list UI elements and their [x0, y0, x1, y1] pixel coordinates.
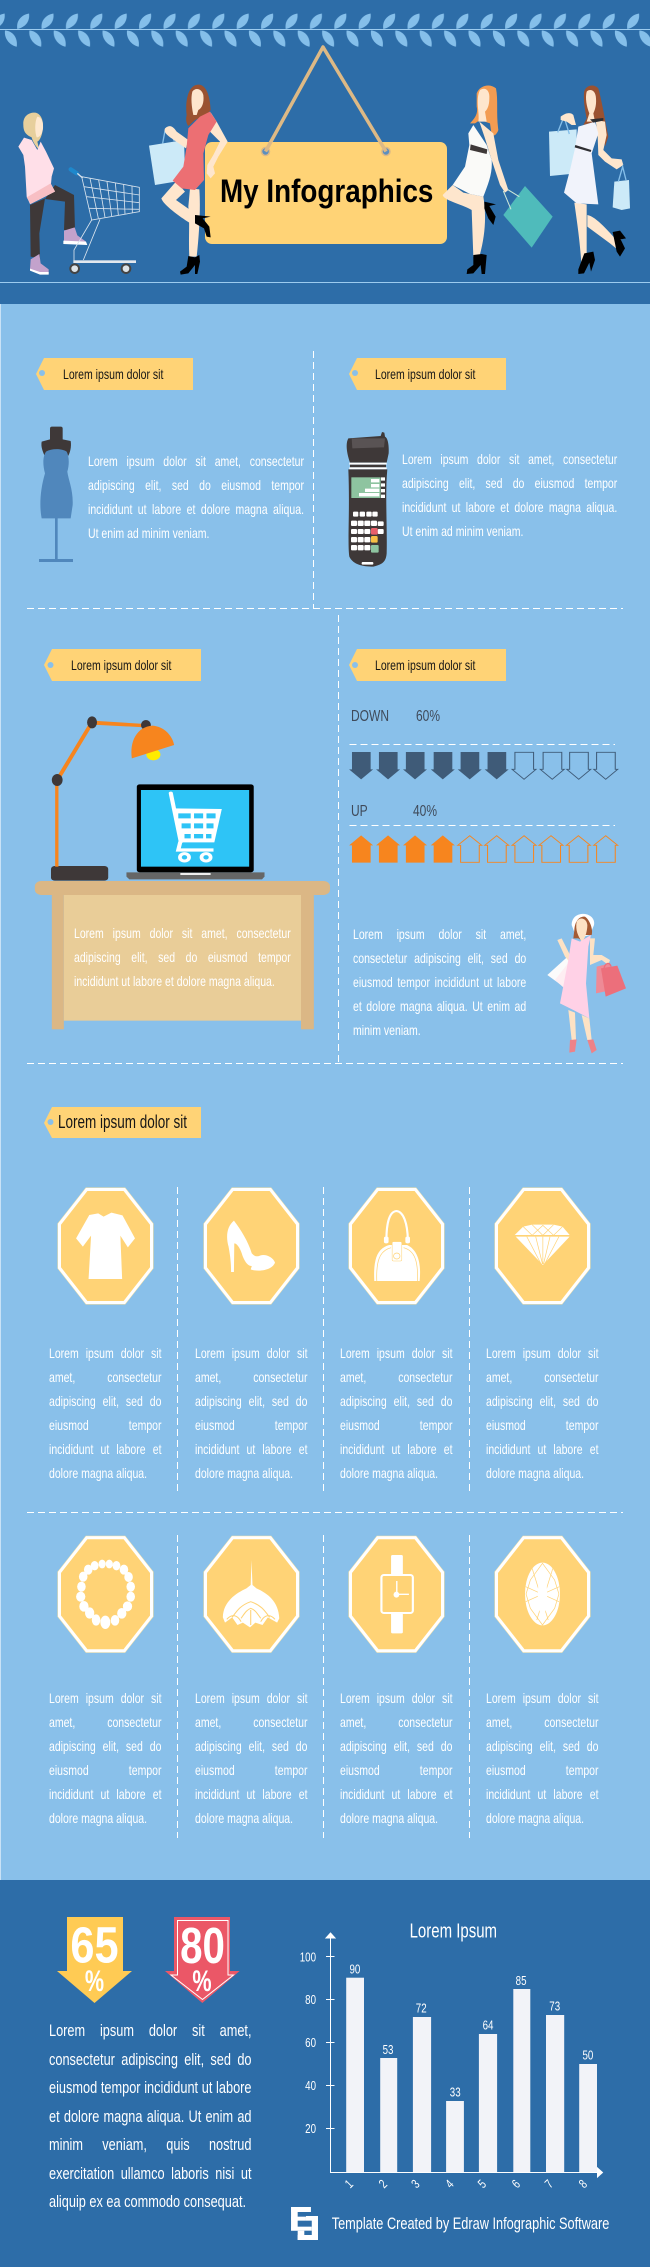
text block: beside woman: consectetur adipiscing elit, sed do [353, 950, 526, 966]
text: diamond column: eiusmod tempor [486, 1417, 599, 1433]
text: handbag column: eiusmod tempor [340, 1417, 453, 1433]
text: diamond column: incididunt ut labore et [486, 1441, 599, 1457]
text block: beside woman: Lorem ipsum dolor sit amet, [353, 926, 526, 942]
icon: card payment terminal [347, 432, 389, 567]
tag: products heading [44, 1107, 201, 1138]
text: pendant column: eiusmod tempor [195, 1762, 308, 1778]
text: heel column: adipiscing elit, sed do [195, 1393, 308, 1409]
chart y axis labels: 20 [305, 2123, 316, 2137]
callout: 65 percent arrow [57, 1917, 132, 2003]
tag: arrows heading [349, 649, 506, 681]
text block: beside woman: eiusmod tempor incididunt ut labore [353, 974, 526, 990]
chart value labels: 85 [516, 1975, 527, 1988]
text: shirt column: incididunt ut labore et [49, 1441, 162, 1457]
label: up percent: 40% [413, 803, 437, 820]
text: gem column: dolore magna aliqua. [486, 1810, 584, 1826]
icon: oval gem [494, 1536, 590, 1653]
text block: mannequin description: Lorem ipsum dolor sit amet, consectetur [88, 453, 304, 469]
icon: high heel [204, 1188, 300, 1304]
chart title: Lorem Ipsum [410, 1919, 497, 1942]
text: pendant column [195, 1690, 308, 1826]
text: watch column: dolore magna aliqua. [340, 1810, 438, 1826]
callout: 80 percent arrow: 80 [180, 1916, 225, 1974]
text: watch column: amet, consectetur [340, 1714, 453, 1730]
chart x axis labels [343, 2178, 590, 2191]
text: handbag column: Lorem ipsum dolor sit [340, 1345, 453, 1361]
heading: desk tag label: Lorem ipsum dolor sit [71, 657, 171, 673]
text: bracelet column: incididunt ut labore et [49, 1786, 162, 1802]
text block: terminal description: Lorem ipsum dolor sit amet, consectetur [402, 451, 617, 467]
text: bracelet column: adipiscing elit, sed do [49, 1738, 162, 1754]
chart x axis labels: 1 [343, 2178, 356, 2191]
chart value labels [349, 1964, 593, 2100]
label: down percent: 60% [416, 708, 440, 725]
text block: mannequin description: Ut enim ad minim veniam. [88, 525, 209, 541]
text: pendant column: adipiscing elit, sed do [195, 1738, 308, 1754]
text block: footer paragraph: et dolore magna aliqua. Ut enim ad [49, 2106, 252, 2126]
chart bars [346, 1978, 597, 2172]
text: gem column: incididunt ut labore et [486, 1786, 599, 1802]
text block: beside woman [353, 926, 526, 1038]
text: watch column: adipiscing elit, sed do [340, 1738, 453, 1754]
chart y axis labels: 100 [300, 1951, 316, 1965]
text block: footer paragraph: consectetur adipiscing elit, sed do [49, 2050, 252, 2068]
text: shirt column: Lorem ipsum dolor sit [49, 1345, 162, 1361]
text: shirt column: adipiscing elit, sed do [49, 1393, 162, 1409]
sign title: My Infographics [220, 174, 433, 209]
chart y axis labels: 40 [305, 2080, 316, 2094]
text: gem column: adipiscing elit, sed do [486, 1738, 599, 1754]
chart y axis labels: 80 [305, 1994, 316, 2008]
text: heel column [195, 1345, 308, 1481]
chart x axis labels: 7 [543, 2178, 556, 2191]
chart x axis labels: 5 [476, 2178, 489, 2191]
figure: woman in pink dress [547, 914, 626, 1053]
text: handbag column: incididunt ut labore et [340, 1441, 453, 1457]
tag: desk heading [44, 649, 201, 681]
figure: woman in white dress with teal bag [443, 86, 553, 274]
heading: products tag label: Lorem ipsum dolor sit [58, 1112, 187, 1132]
text: shirt column: eiusmod tempor [49, 1417, 162, 1433]
illustration: desk [35, 881, 330, 1029]
text: bracelet column: Lorem ipsum dolor sit [49, 1690, 162, 1706]
text: diamond column: Lorem ipsum dolor sit [486, 1345, 599, 1361]
text: handbag column: amet, consectetur [340, 1369, 453, 1385]
chart value labels: 33 [450, 2087, 461, 2100]
text block: mannequin description [88, 453, 304, 541]
text: gem column: amet, consectetur [486, 1714, 599, 1730]
text: watch column: Lorem ipsum dolor sit [340, 1690, 453, 1706]
chart: up arrows 40% [349, 835, 618, 863]
text: bracelet column: eiusmod tempor [49, 1762, 162, 1778]
text: gem column [486, 1690, 599, 1826]
text: gem column: eiusmod tempor [486, 1762, 599, 1778]
icon: pendant necklace [204, 1536, 300, 1653]
text block: terminal description: adipiscing elit, sed do eiusmod tempor [402, 475, 617, 491]
text: watch column: incididunt ut labore et [340, 1786, 453, 1802]
chart x axis labels: 6 [510, 2178, 523, 2191]
panel: top info section [0, 304, 623, 609]
text block: terminal description: Ut enim ad minim veniam. [402, 523, 523, 539]
text block: on desk [74, 925, 291, 989]
chart value labels: 72 [416, 2003, 427, 2016]
text: gem column: Lorem ipsum dolor sit [486, 1690, 599, 1706]
figure: woman with blue bags [549, 85, 630, 274]
text: shirt column [49, 1345, 162, 1481]
icon: diamond [494, 1188, 590, 1304]
text: diamond column: adipiscing elit, sed do [486, 1393, 599, 1409]
icon: handbag [348, 1188, 444, 1304]
callout: 65 percent arrow: 65 [70, 1917, 119, 1975]
text block: terminal description [402, 451, 618, 539]
panel: product icons section [0, 1064, 623, 1880]
chart axes [326, 1933, 602, 2177]
callout: 80 percent arrow [165, 1916, 240, 2003]
text: pendant column: Lorem ipsum dolor sit [195, 1690, 308, 1706]
heading: left tag label: Lorem ipsum dolor sit [63, 366, 163, 382]
text block: on desk: Lorem ipsum dolor sit amet, consectetur [74, 925, 291, 941]
text block: terminal description: incididunt ut labore et dolore magna aliqua. [402, 499, 617, 515]
text block: on desk: adipiscing elit, sed do eiusmod tempor [74, 949, 291, 965]
heading: arrows tag label: Lorem ipsum dolor sit [375, 657, 475, 673]
text block: footer paragraph: exercitation ullamco laboris nisi ut [49, 2164, 252, 2182]
heading: right tag label: Lorem ipsum dolor sit [375, 366, 475, 382]
panel: footer statistics and chart [0, 1880, 650, 2267]
chart: bar chart [300, 1919, 602, 2191]
text: heel column: amet, consectetur [195, 1369, 308, 1385]
label: down: DOWN [351, 708, 389, 725]
text: heel column: Lorem ipsum dolor sit [195, 1345, 308, 1361]
chart value labels: 50 [582, 2050, 593, 2063]
chart: down arrows 60% [349, 752, 618, 779]
text block: footer paragraph [49, 2021, 252, 2211]
text: bracelet column: amet, consectetur [49, 1714, 162, 1730]
text: bracelet column [49, 1690, 162, 1826]
callout: 80 percent arrow: % [192, 1963, 212, 1998]
chart value labels: 53 [383, 2044, 393, 2057]
chart x axis labels: 8 [577, 2178, 590, 2191]
illustration: desk lamp [51, 716, 174, 881]
icon: Edraw logo [291, 2207, 318, 2240]
text: heel column: dolore magna aliqua. [195, 1465, 293, 1481]
label: up: UP [351, 803, 368, 820]
text: diamond column [486, 1345, 599, 1481]
text: bracelet column: dolore magna aliqua. [49, 1810, 147, 1826]
panel: header banner [0, 0, 650, 304]
text block: footer paragraph: Lorem ipsum dolor sit amet, [49, 2021, 252, 2040]
text: handbag column: dolore magna aliqua. [340, 1465, 438, 1481]
callout: 65 percent arrow: % [85, 1963, 104, 1998]
tag: left heading [36, 358, 193, 390]
panel: desk and arrows section [0, 609, 626, 1064]
text: heel column: eiusmod tempor [195, 1417, 308, 1433]
text block: footer paragraph: eiusmod tempor incididunt ut labore [49, 2078, 252, 2097]
icon: pearl bracelet [58, 1536, 154, 1653]
chart x axis labels: 4 [443, 2178, 457, 2191]
text: shirt column: amet, consectetur [49, 1369, 162, 1385]
text: pendant column: dolore magna aliqua. [195, 1810, 293, 1826]
text: watch column [340, 1690, 453, 1826]
chart y axis labels: 60 [305, 2037, 316, 2051]
text: watch column: eiusmod tempor [340, 1762, 453, 1778]
tag: right heading [349, 358, 506, 390]
text: diamond column: dolore magna aliqua. [486, 1465, 584, 1481]
icon: shirt [58, 1188, 154, 1304]
chart value labels: 90 [349, 1964, 360, 1977]
figure: girl with shopping cart [18, 113, 139, 275]
footer credit: Template Created by Edraw Infographic Software [332, 2214, 609, 2234]
text block: mannequin description: adipiscing elit, sed do eiusmod tempor [88, 477, 304, 493]
text block: footer paragraph: aliquip ex ea commodo consequat. [49, 2192, 246, 2211]
text block: footer paragraph: minim veniam, quis nostrud [49, 2135, 252, 2154]
chart value labels: 64 [483, 2020, 494, 2033]
icon: dress mannequin [39, 427, 73, 562]
text: shirt column: dolore magna aliqua. [49, 1465, 147, 1481]
illustration: laptop with cart [126, 784, 265, 879]
chart y axis labels [300, 1951, 316, 2137]
text block: mannequin description: incididunt ut labore et dolore magna aliqua. [88, 501, 304, 517]
text block: beside woman: minim veniam. [353, 1022, 421, 1038]
chart x axis labels: 3 [409, 2178, 423, 2191]
chart value labels: 73 [549, 2001, 560, 2014]
text: pendant column: incididunt ut labore et [195, 1786, 308, 1802]
text: heel column: incididunt ut labore et [195, 1441, 308, 1457]
figure: woman in red dress [149, 85, 228, 275]
text: handbag column: adipiscing elit, sed do [340, 1393, 453, 1409]
hanging sign [205, 47, 447, 244]
text: pendant column: amet, consectetur [195, 1714, 308, 1730]
icon: wristwatch [348, 1536, 444, 1653]
text: handbag column [340, 1345, 453, 1481]
text block: on desk: incididunt ut labore et dolore magna aliqua. [74, 973, 275, 989]
leaf garland [0, 13, 650, 47]
text: diamond column: amet, consectetur [486, 1369, 599, 1385]
text block: beside woman: et dolore magna aliqua. Ut enim ad [353, 998, 526, 1014]
chart x axis labels: 2 [377, 2178, 390, 2191]
